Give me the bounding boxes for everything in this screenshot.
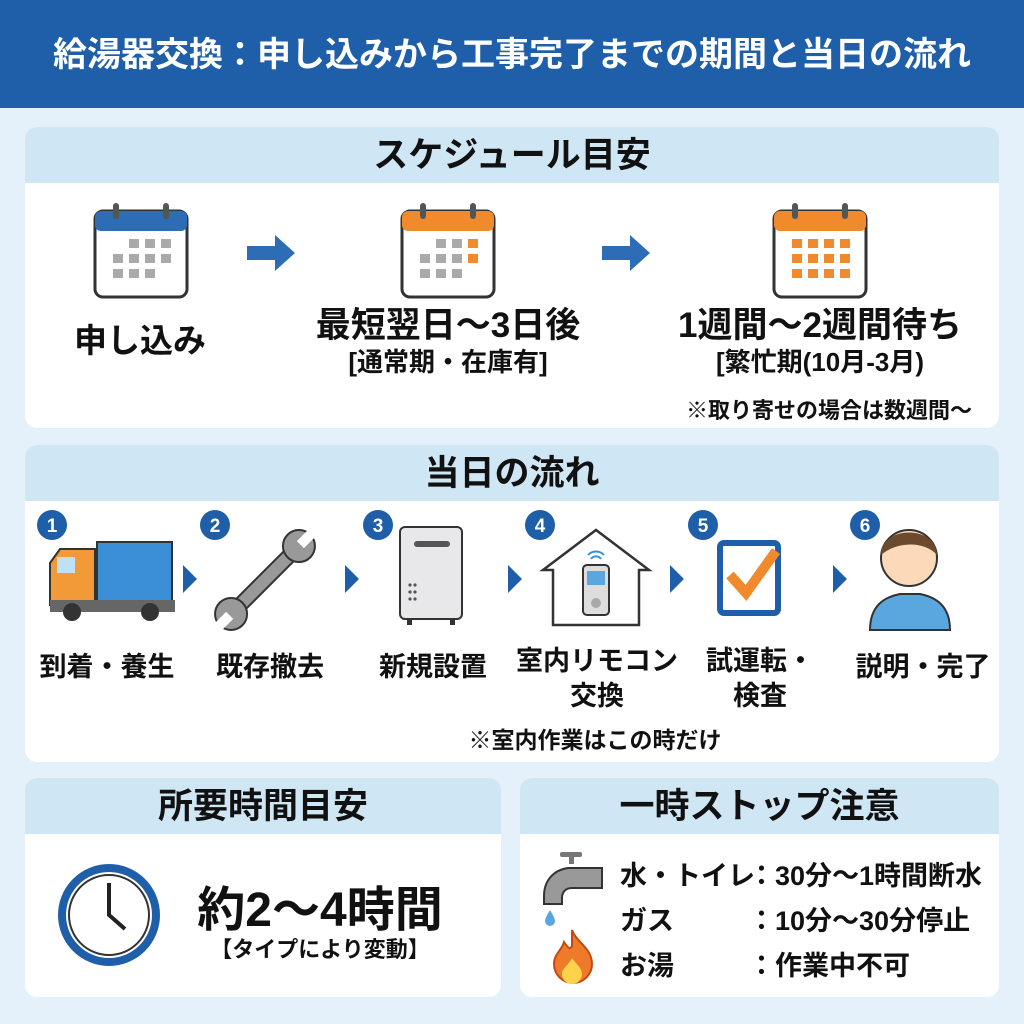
stop rows: お湯 xyxy=(620,951,674,981)
panel: stops: ：作業中不可 xyxy=(748,951,910,981)
step numbers: 1 xyxy=(47,516,58,537)
heading: schedule: スケジュール目安 xyxy=(373,136,651,175)
note: indoor: ※室内作業はこの時だけ xyxy=(468,727,722,753)
step numbers: 5 xyxy=(698,516,709,537)
text: busy: 1週間～2週間待ち xyxy=(678,306,962,345)
icon: flame xyxy=(553,930,593,984)
step numbers: 4 xyxy=(535,516,546,537)
heading: stops xyxy=(520,778,999,834)
panel: day flow: 試運転・ xyxy=(706,646,814,676)
heading: time: 所要時間目安 xyxy=(158,787,368,826)
panel: day flow: 室内リモコン xyxy=(516,646,678,676)
panel: day flow: 検査 xyxy=(733,681,787,711)
panel: stops xyxy=(520,778,999,997)
panel: day flow: 既存撤去 xyxy=(216,652,324,682)
icon: calendar orange full xyxy=(772,203,868,298)
icon: faucet xyxy=(543,852,603,926)
text: shortest xyxy=(316,306,580,377)
stop rows: ガス xyxy=(620,906,674,936)
icon: truck xyxy=(50,542,175,621)
step numbers: 6 xyxy=(860,516,870,537)
icon: calendar gray xyxy=(94,203,188,298)
stop rows xyxy=(620,861,755,981)
text: busy: [繁忙期(10月-3月) xyxy=(716,347,924,377)
step numbers xyxy=(37,510,951,631)
icon: calendar orange partial xyxy=(400,203,496,298)
arrow 2 xyxy=(602,235,650,271)
panel: day flow: 新規設置 xyxy=(379,652,487,682)
icon: wrench xyxy=(206,521,324,639)
text: duration: 約2～4時間 xyxy=(197,884,443,937)
header: 給湯器交換：申し込みから工事完了までの期間と当日の流れ xyxy=(53,36,971,74)
icon: person xyxy=(870,530,950,630)
text: shortest: 最短翌日～3日後 xyxy=(316,306,580,345)
heading: stops: 一時ストップ注意 xyxy=(619,787,900,826)
note: ※取り寄せの場合は数週間～ xyxy=(686,398,972,423)
panel: day flow: 交換 xyxy=(570,681,624,711)
step labels: 到着・養生 xyxy=(40,652,174,682)
text: shortest: [通常期・在庫有] xyxy=(348,347,548,377)
panel: schedule xyxy=(25,127,999,428)
text: apply: 申し込み xyxy=(74,322,206,359)
icon: house remote xyxy=(543,530,649,625)
panel: day flow xyxy=(25,445,999,762)
heading: time xyxy=(25,778,501,834)
heading: day flow: 当日の流れ xyxy=(424,454,600,493)
step numbers: 2 xyxy=(210,516,220,537)
icon: water heater xyxy=(400,527,462,625)
step numbers: 3 xyxy=(373,516,383,537)
icon: checkbox xyxy=(720,543,778,613)
stop rows: 水・トイレ xyxy=(620,861,755,891)
header xyxy=(0,0,1024,108)
arrow 1 xyxy=(247,235,295,271)
icon: clock xyxy=(58,864,160,966)
panel: time: 【タイプにより変動】 xyxy=(210,937,430,962)
panel: stops: ：10分～30分停止 xyxy=(748,906,970,936)
panel: stops: ：30分～1時間断水 xyxy=(748,861,982,891)
panel: time xyxy=(25,778,501,997)
heading: day flow xyxy=(25,445,999,501)
text: busy xyxy=(678,306,962,377)
panel: day flow: 説明・完了 xyxy=(856,652,990,682)
heading: schedule xyxy=(25,127,999,183)
